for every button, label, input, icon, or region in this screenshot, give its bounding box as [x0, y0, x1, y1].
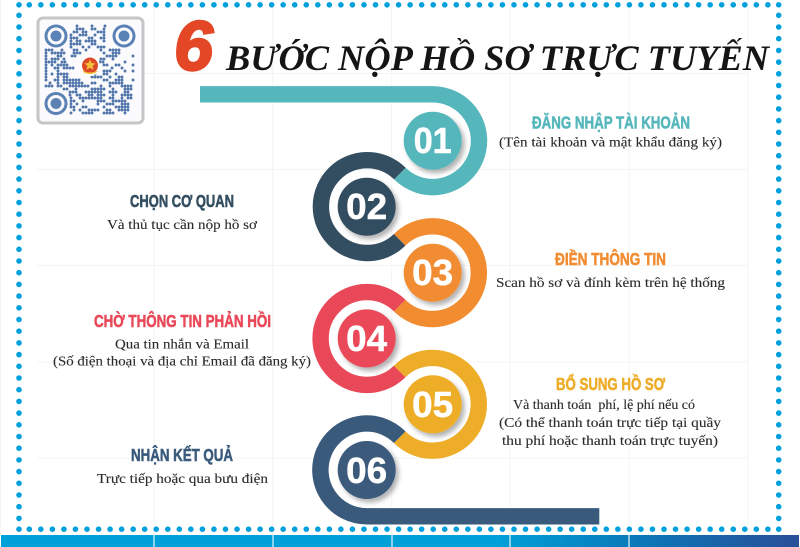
step 01 text: ĐĂNG NHẬP TÀI KHOẢN: [532, 112, 690, 132]
step 03 ribbon: [400, 226, 479, 319]
QR national emblem: [80, 56, 100, 76]
step 04 badge: 04: [346, 318, 387, 359]
step 06 ribbon: [320, 424, 599, 516]
step 01 ribbon: [200, 94, 479, 187]
step 05 ribbon: [400, 358, 479, 451]
step 01 text: [499, 112, 722, 151]
step 05 text: (Có thể thanh toán trực tiếp tại quầy: [499, 416, 721, 431]
step 01 badge: [404, 112, 462, 170]
step 04 text: [53, 310, 311, 370]
step 01 text: (Tên tài khoản và mật khẩu đăng ký): [499, 136, 722, 151]
step 02 text: Và thủ tục cần nộp hồ sơ: [107, 218, 258, 233]
step 05 text: BỔ SUNG HỒ SƠ: [556, 373, 665, 394]
step 05 badge: 05: [412, 384, 453, 425]
step 02 badge: 02: [346, 186, 387, 227]
step 06 text: NHẬN KẾT QUẢ: [131, 444, 233, 465]
step 04 ribbon: [321, 292, 400, 385]
QR code: [38, 18, 143, 123]
title: [174, 7, 771, 85]
step 06 text: Trực tiếp hoặc qua bưu điện: [97, 472, 268, 487]
step 03 text: [496, 248, 725, 291]
step 04 text: Qua tin nhắn và Email: [115, 337, 249, 352]
step 02 text: [107, 191, 258, 233]
footer colour bar: [1, 535, 799, 547]
step 06 badge: [338, 441, 396, 499]
step 04 text: CHỜ THÔNG TIN PHẢN HỒI: [94, 310, 271, 331]
step 05 text: Và thanh toán phí, lệ phí nếu có: [513, 398, 695, 413]
step 05 text: thu phí hoặc thanh toán trực tuyến): [502, 434, 718, 449]
step 02 text: CHỌN CƠ QUAN: [130, 191, 234, 211]
step 02 ribbon: [321, 160, 400, 253]
QR finder patterns: [46, 26, 134, 114]
title numeral 6: 6: [174, 7, 214, 85]
QR data modules: [46, 26, 134, 113]
step 06 text: [97, 444, 268, 487]
step 03 text: ĐIỀN THÔNG TIN: [555, 248, 666, 269]
step 03 text: Scan hồ sơ và đính kèm trên hệ thống: [496, 276, 725, 291]
step 01 badge: 01: [414, 120, 452, 161]
step 04 text: (Số điện thoại và địa chỉ Email đã đăng ký): [53, 355, 311, 370]
step 06 badge: 06: [346, 450, 387, 491]
title text: BƯỚC NỘP HỒ SƠ TRỰC TUYẾN: [225, 37, 771, 78]
step 05 text: [499, 373, 721, 449]
step 03 badge: 03: [412, 252, 453, 293]
